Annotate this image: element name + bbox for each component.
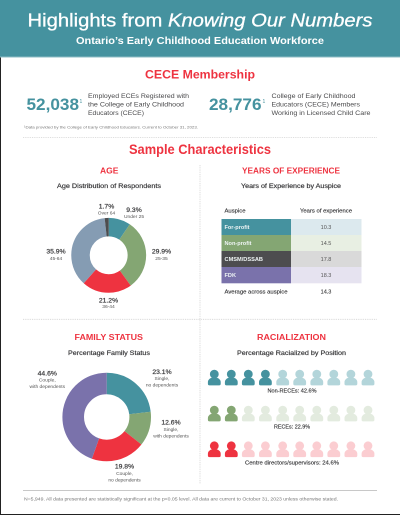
chart subtitle: family status: Percentage Family Status xyxy=(68,350,151,357)
heading: age: AGE xyxy=(100,165,119,175)
data labels: family status: Couple, xyxy=(39,378,56,384)
heading: years of experience: YEARS OF EXPERIENCE xyxy=(242,165,340,175)
data labels: age: 45-64 xyxy=(50,256,63,262)
data labels: family status: no dependents xyxy=(108,478,141,484)
pictogram: non-RECEs xyxy=(208,370,374,395)
table: years of experience by auspice: For-profit xyxy=(224,225,250,231)
pictogram: centre directors: Centre directors/supervisors: 24.6% xyxy=(245,460,339,466)
data labels: age: 21.2% xyxy=(99,297,118,304)
table: years of experience by auspice: FDK xyxy=(224,273,236,279)
table: years of experience by auspice: Average across auspice xyxy=(224,290,288,296)
table: years of experience by auspice: 14.3 xyxy=(321,290,331,296)
data labels: family status: 44.6% xyxy=(38,370,57,377)
heading: CECE Membership: CECE Membership xyxy=(145,68,255,82)
stat: 28,776: 28,776 xyxy=(209,96,262,114)
data labels: family status: Couple, xyxy=(116,471,133,477)
table: years of experience by auspice: 10.3 xyxy=(321,225,331,231)
stat: 52,038: the College of Early Childhood xyxy=(88,101,185,108)
subtitle: Ontario’s Early Childhood Education Workforce xyxy=(76,36,324,47)
chart subtitle: years of experience: Years of Experience by Auspice xyxy=(241,183,341,190)
stat: 52,038 xyxy=(26,93,190,117)
stat: 28,776: College of Early Childhood xyxy=(272,93,356,100)
stat: 28,776: Educators (CECE) Members xyxy=(272,101,360,108)
data labels: family status: Single, xyxy=(155,376,169,382)
data labels: age: 35.9% xyxy=(46,248,66,255)
data labels: age: 29.9% xyxy=(152,248,171,255)
footer note: N=5,949. All data presented are statistically significant at the p<0.05 level. All data are current to October 31, 2023 unless otherwise stated. xyxy=(24,496,338,501)
stat: 52,038: Educators (CECE) xyxy=(88,110,144,117)
heading: family status: FAMILY STATUS xyxy=(74,332,143,342)
data labels: family status: 12.6% xyxy=(161,419,181,426)
stat: 28,776: 1 xyxy=(262,99,266,105)
data labels: age xyxy=(46,204,171,310)
stat: 52,038: Employed ECEs Registered with xyxy=(88,93,190,100)
pictogram: non-RECEs: Non-RECEs: 42.6% xyxy=(268,389,317,395)
pictogram: centre directors xyxy=(208,441,374,466)
pictogram: RECEs xyxy=(208,406,374,431)
table: years of experience by auspice: Non-profit xyxy=(224,241,252,247)
stat: 28,776: Working in Licensed Child Care xyxy=(272,110,371,117)
panel: years of experience xyxy=(222,165,362,296)
data labels: family status: 23.1% xyxy=(152,369,172,376)
footnote: ¹Data provided by the College of Early Childhood Educators. Current to October 31, 2023. xyxy=(24,126,198,130)
data labels: age: Over 64 xyxy=(98,211,115,217)
data labels: family status: with dependents xyxy=(29,384,66,390)
chart subtitle: racialization: Percentage Racialized by Position xyxy=(237,350,346,357)
data labels: age: 36-44 xyxy=(102,304,115,310)
data labels: age: 1.7% xyxy=(99,204,114,211)
heading: Sample Characteristics: Sample Characteristics xyxy=(129,141,271,157)
table: years of experience by auspice: CMSM/DSSAB xyxy=(224,257,263,263)
data labels: family status: Single, xyxy=(164,427,178,433)
table: years of experience by auspice: 18.3 xyxy=(321,273,331,279)
data labels: age: Under 25 xyxy=(124,214,144,220)
panel: age xyxy=(46,165,171,310)
table: years of experience by auspice xyxy=(222,209,362,296)
data labels: family status: with dependents xyxy=(153,433,189,439)
chart subtitle: age: Age Distribution of Respondents xyxy=(57,183,162,190)
table: years of experience by auspice: 17.8 xyxy=(321,257,331,263)
data labels: family status: 19.8% xyxy=(115,464,134,471)
donut chart: age xyxy=(80,227,137,284)
panel: family status xyxy=(29,332,189,484)
stat: 52,038: 1 xyxy=(80,99,82,105)
table: years of experience by auspice: Years of experience xyxy=(300,209,352,215)
pictogram: RECEs: RECEs: 22.9% xyxy=(274,425,310,431)
table: years of experience by auspice: Auspice xyxy=(224,209,246,215)
stat: 28,776 xyxy=(209,93,371,117)
donut chart: family status xyxy=(73,384,140,450)
panel: racialization xyxy=(208,332,374,466)
panel: CECE membership xyxy=(24,68,371,130)
stat: 52,038: 52,038 xyxy=(26,96,79,114)
data labels: age: 25-35 xyxy=(155,256,168,262)
table: years of experience by auspice: 14.5 xyxy=(321,241,331,247)
title: Highlights from Knowing Our Numbers xyxy=(28,10,372,31)
heading: racialization: RACIALIZATION xyxy=(257,332,326,342)
data labels: family status: no dependents xyxy=(146,382,179,388)
data labels: age: 9.3% xyxy=(126,207,142,214)
data labels: family status xyxy=(29,369,189,484)
header banner xyxy=(0,0,400,58)
